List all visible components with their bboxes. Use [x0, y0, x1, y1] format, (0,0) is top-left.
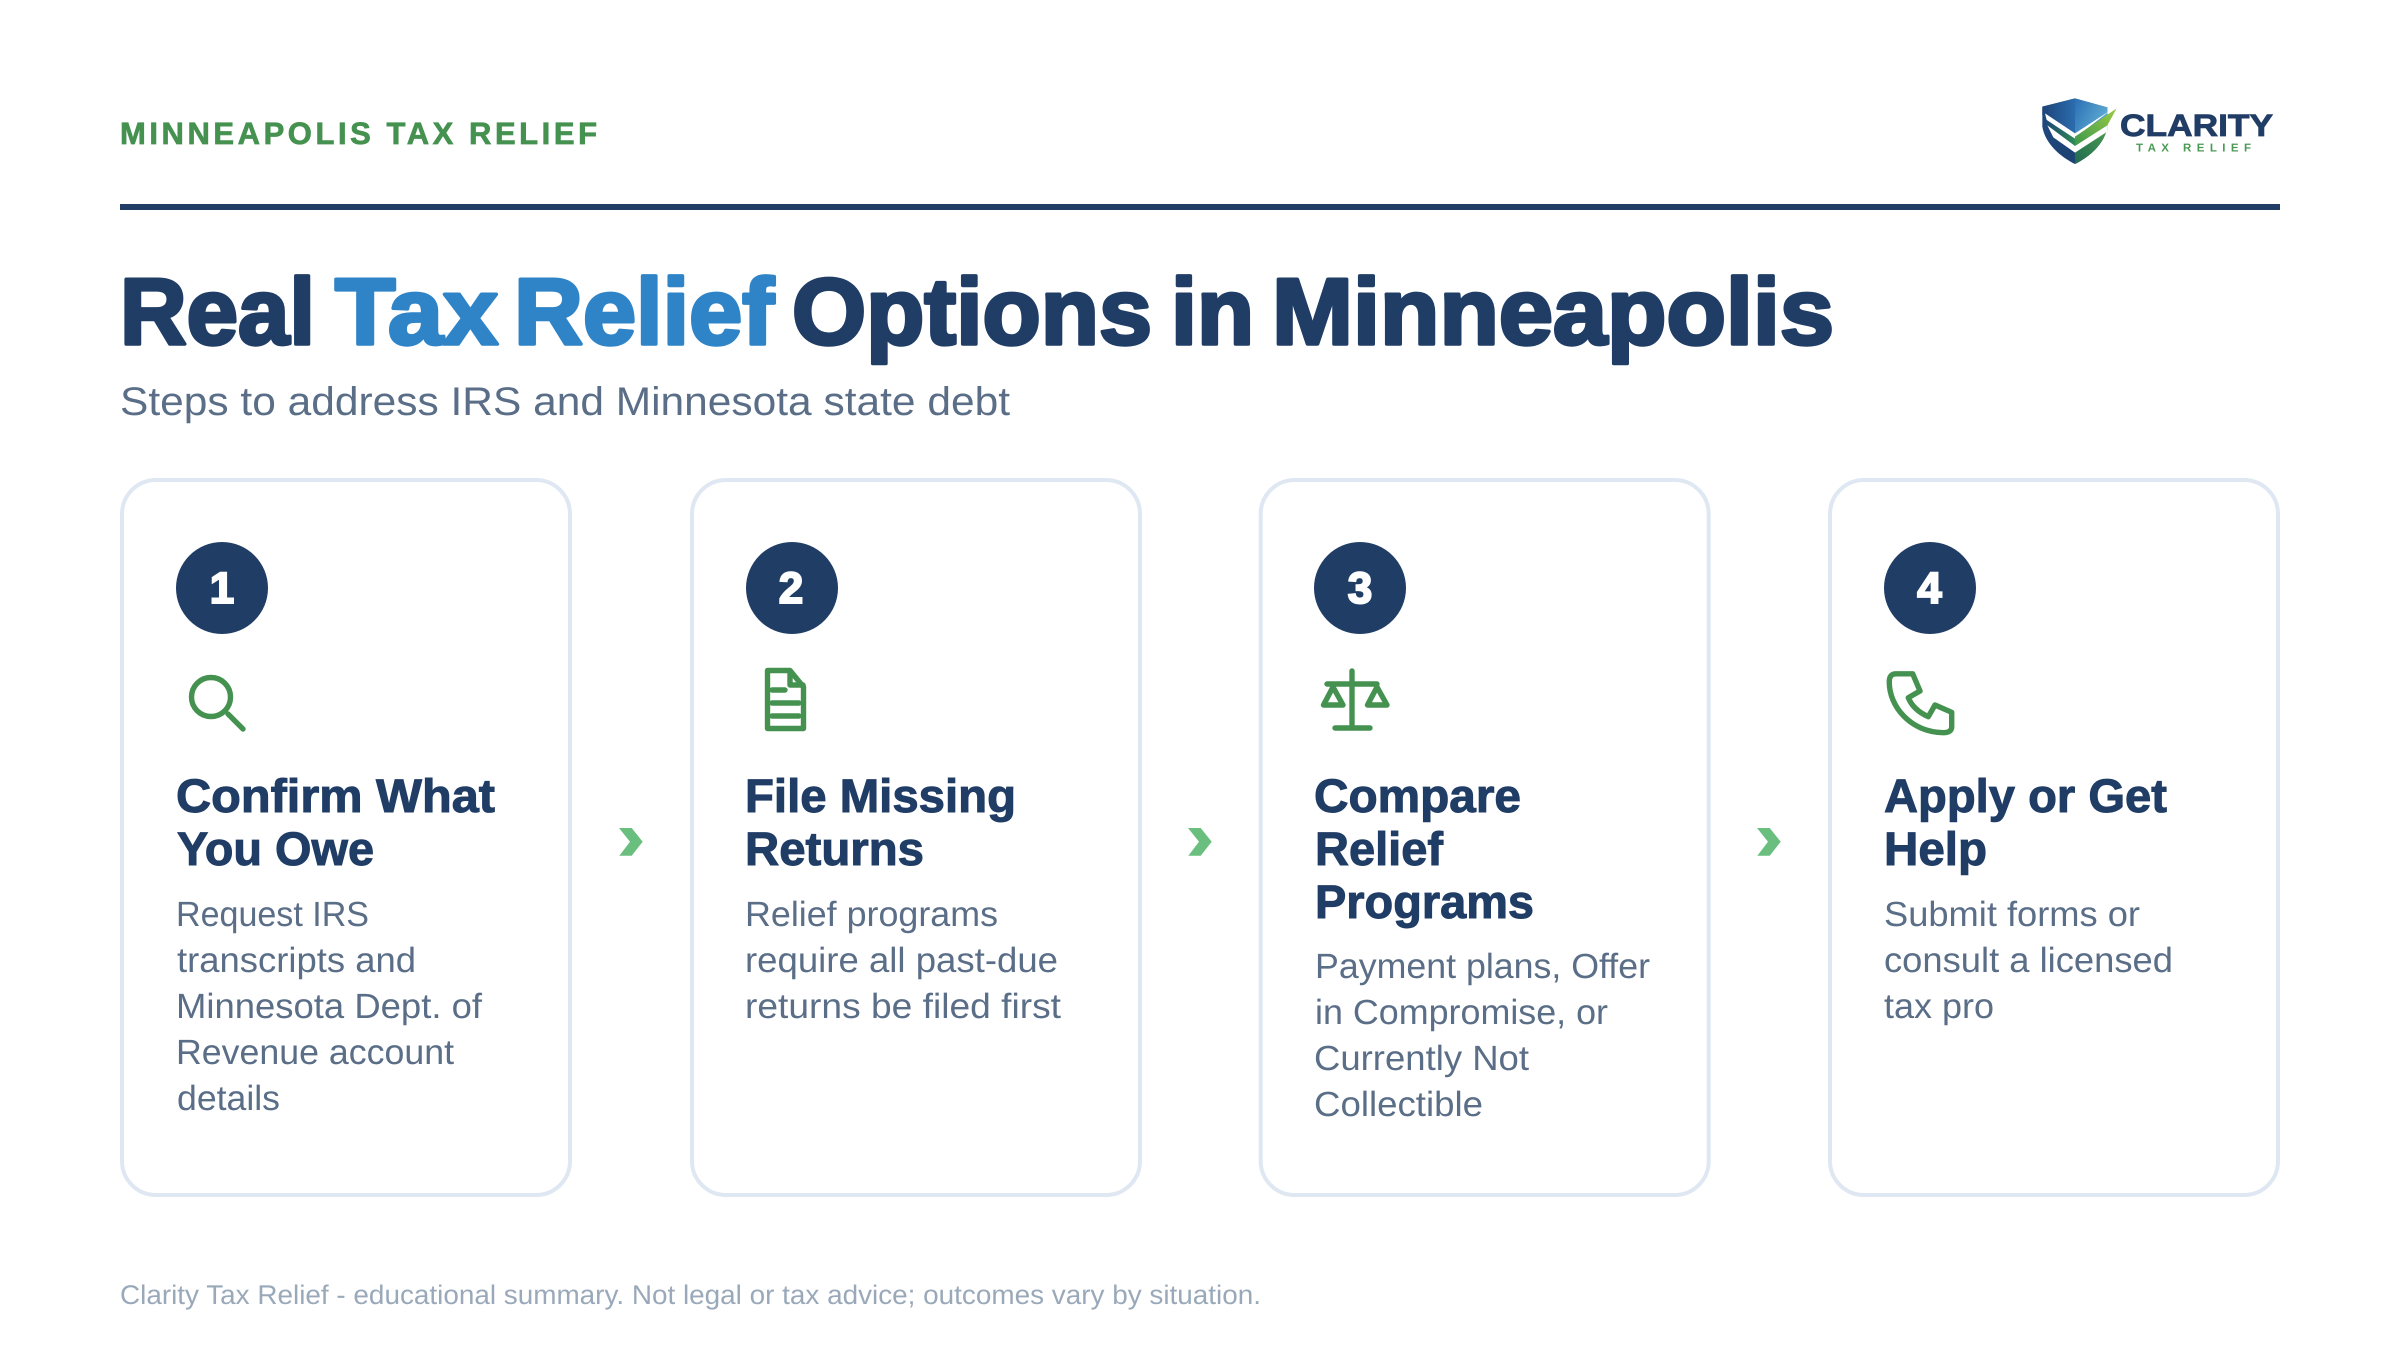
text: step 3 description: Currently Not [1314, 1039, 1529, 1078]
text: step 3 description [1314, 947, 1650, 1124]
subtitle: Steps to address IRS and Minnesota state debt [120, 380, 1010, 424]
header rule [120, 204, 2280, 210]
text: step 4 description [1884, 895, 2173, 1026]
text: step 4 description: tax pro [1884, 987, 1994, 1026]
heading: step 2: File Missing [745, 769, 1016, 822]
number badge 2 [746, 542, 838, 634]
text: step 3 description: Payment plans, Offer [1315, 947, 1650, 986]
number badge 4: 4 [1917, 564, 1942, 613]
text: step 2 description: returns be filed first [745, 987, 1061, 1026]
number badge 1 [176, 542, 268, 634]
icon: logo shield [2042, 98, 2117, 164]
heading: step 4: Help [1884, 822, 1987, 875]
text: step 1 description: Request IRS [176, 895, 369, 934]
text: step 2 description: require all past-due [745, 941, 1058, 980]
icon: phone [1889, 674, 1952, 733]
title [120, 259, 1834, 364]
title: in [1171, 259, 1254, 364]
logo wordmark: CLARITY [2120, 108, 2273, 143]
text: step 1 description: Minnesota Dept. of [176, 987, 482, 1026]
text: step 1 description: details [177, 1079, 280, 1118]
heading: step 2: Returns [745, 822, 924, 875]
heading: step 3 [1314, 769, 1534, 928]
text: step 2 description: Relief programs [745, 895, 998, 934]
panel: step 1 [122, 480, 570, 1195]
number badge 2: 2 [779, 564, 803, 613]
panel: step 2 [692, 480, 1140, 1195]
heading: step 3: Compare [1314, 769, 1521, 822]
text: step 3 description: in Compromise, or [1315, 993, 1608, 1032]
heading: step 2 [745, 769, 1016, 875]
text: step 3 description: Collectible [1314, 1085, 1483, 1124]
footer disclaimer: Clarity Tax Relief - educational summary. Not legal or tax advice; outcomes vary by situation. [120, 1280, 1261, 1310]
number badge 1: 1 [210, 564, 234, 613]
panel: step 3 [1261, 480, 1709, 1195]
heading: step 1: Confirm What [176, 769, 495, 822]
heading: step 1: You Owe [177, 822, 374, 875]
text: step 1 description: transcripts and [177, 941, 416, 980]
arrow 1 to 2 [619, 828, 643, 856]
text: step 2 description [745, 895, 1061, 1026]
heading: step 4 [1884, 769, 2167, 875]
arrow 2 to 3 [1188, 828, 1212, 856]
heading: step 3: Relief [1315, 822, 1443, 875]
title: Real [120, 259, 315, 364]
title: Options [792, 259, 1152, 364]
icon: document [768, 670, 804, 728]
heading: step 3: Programs [1315, 875, 1534, 928]
text: step 1 description: Revenue account [176, 1033, 454, 1072]
title: Tax [335, 259, 498, 364]
number badge 3: 3 [1348, 564, 1372, 613]
icon: magnifying glass [192, 678, 243, 729]
number badge 4 [1884, 542, 1976, 634]
icon: balance scale [1324, 671, 1387, 728]
logo tagline: TAX RELIEF [2136, 142, 2251, 154]
logo: Clarity Tax Relief [2042, 98, 2273, 164]
arrow 3 to 4 [1757, 828, 1781, 856]
heading: step 4: Apply or Get [1884, 769, 2167, 822]
text: step 4 description: consult a licensed [1884, 941, 2173, 980]
panel: step 4 [1830, 480, 2278, 1195]
title: Relief [514, 259, 775, 364]
title: Minneapolis [1272, 259, 1834, 364]
text: step 1 description [176, 895, 482, 1118]
number badge 3 [1314, 542, 1406, 634]
heading: step 1 [176, 769, 495, 875]
text: step 4 description: Submit forms or [1884, 895, 2140, 934]
eyebrow: Minneapolis Tax Relief: MINNEAPOLIS TAX RELIEF [120, 116, 597, 151]
